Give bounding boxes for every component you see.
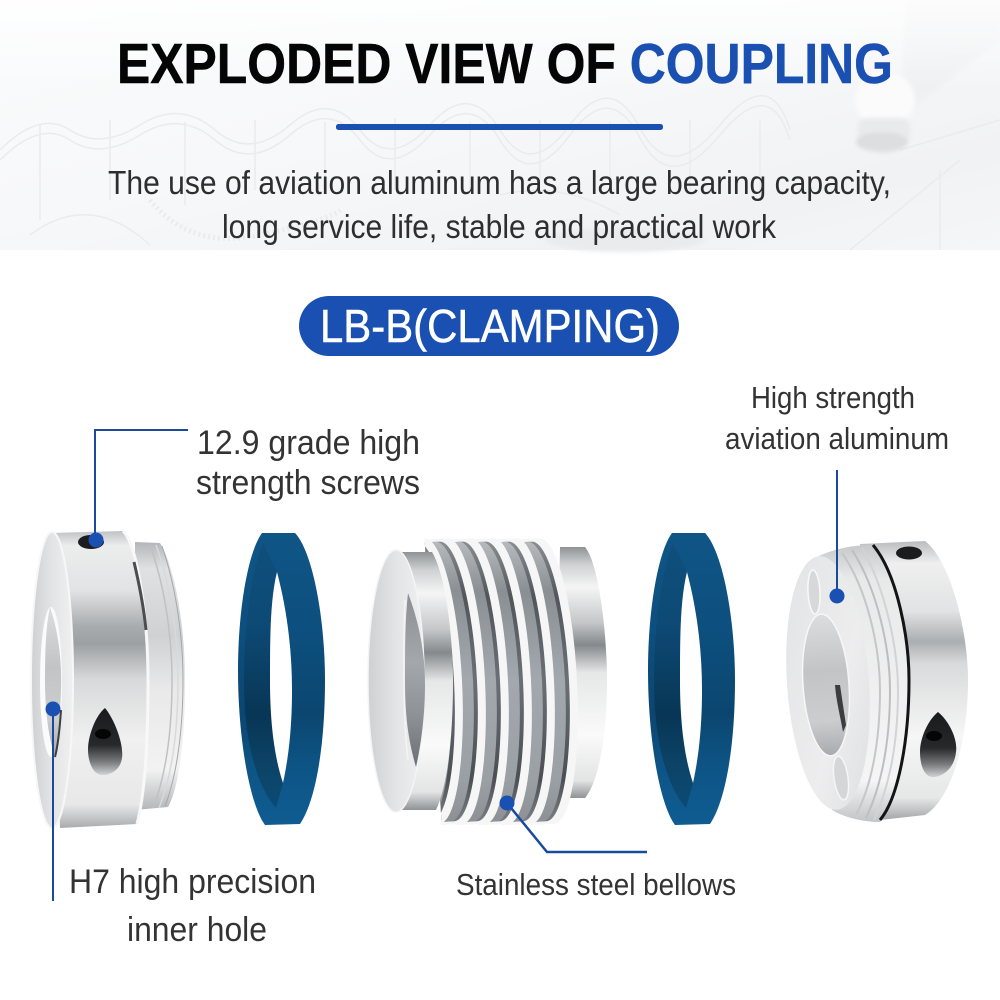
callout: inner hole xyxy=(46,702,316,949)
bellows right sleeve xyxy=(555,547,607,798)
callout: aviation aluminum: High strength xyxy=(751,380,915,415)
hub lower small hole xyxy=(831,755,851,801)
callout: inner hole: inner hole xyxy=(127,911,267,949)
title: EXPLODED VIEW OF COUPLING xyxy=(117,32,893,96)
model pill badge: LB-B(CLAMPING) xyxy=(320,300,660,352)
callout: bellows xyxy=(456,796,736,902)
hub front face xyxy=(778,553,878,813)
title underline xyxy=(336,124,663,130)
hub threaded section xyxy=(815,545,908,822)
hub body xyxy=(50,531,148,828)
hub top screw hole xyxy=(896,546,922,560)
hub side screw hole xyxy=(920,712,956,777)
bellows left sleeve xyxy=(396,552,453,810)
callout: screws: strength screws xyxy=(196,464,420,502)
hub body xyxy=(860,541,968,820)
subtitle: long service life, stable and practical work xyxy=(222,209,776,246)
callout: screws xyxy=(88,424,420,548)
bellows front face xyxy=(368,550,424,812)
subtitle xyxy=(108,165,891,246)
right clamping hub xyxy=(778,541,968,822)
hub inner bore xyxy=(40,607,62,757)
hub black groove xyxy=(873,545,909,820)
left blue ring xyxy=(238,533,325,825)
subtitle: The use of aviation aluminum has a large bearing capacity, xyxy=(108,165,891,202)
hub threaded section xyxy=(135,542,185,810)
callout: bellows: Stainless steel bellows xyxy=(456,867,736,902)
bellows convolutions xyxy=(424,538,578,825)
header band with faint technical drawing xyxy=(0,0,1000,252)
hub center bore xyxy=(798,613,854,757)
bellows inner bore xyxy=(405,593,425,767)
callout: screws: 12.9 grade high xyxy=(197,424,420,462)
hub upper small hole xyxy=(807,570,821,614)
callout: aviation aluminum xyxy=(725,380,949,604)
hub top screw hole xyxy=(78,535,104,549)
hub side screw hole xyxy=(88,708,122,775)
callout: inner hole: H7 high precision xyxy=(69,863,316,901)
left clamping hub xyxy=(31,531,185,828)
callout: aviation aluminum: aviation aluminum xyxy=(725,421,949,456)
hub front face xyxy=(31,532,73,828)
right blue ring xyxy=(648,533,735,825)
center bellows xyxy=(368,537,607,826)
